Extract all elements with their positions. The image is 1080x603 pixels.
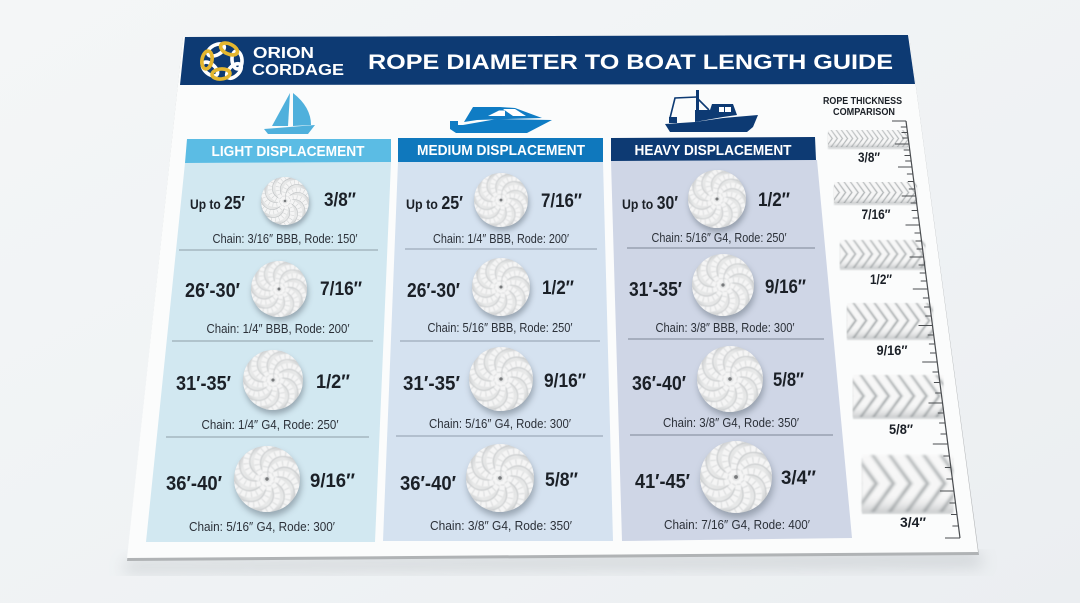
row: 41-45: 3/4″ <box>781 468 816 489</box>
row: up to 25 <box>406 168 582 246</box>
row: up to 25: Up to 25′ <box>190 193 245 213</box>
rope sample 9/16 <box>847 303 933 358</box>
icon: sailboat <box>264 93 315 134</box>
rope sample 1/2: 1/2″ <box>870 272 892 287</box>
brand name: ORION <box>253 45 314 62</box>
rope sample 1/2 <box>840 240 925 287</box>
row: 36-40: 36′-40′ <box>400 473 456 495</box>
row: 26-30: 1/2″ <box>542 278 574 299</box>
row: 31-35: 31′-35′ <box>176 373 231 395</box>
row: 31-35 <box>403 341 586 431</box>
panel header <box>185 139 391 163</box>
panel header: HEAVY DISPLACEMENT <box>634 142 792 159</box>
row: 36-40: Chain: 3/8″ G4, Rode: 350′ <box>663 416 800 430</box>
row: 36-40 <box>166 440 355 534</box>
rope sample 5/8: 5/8″ <box>889 422 914 437</box>
row: 31-35 <box>629 249 806 335</box>
title: ROPE DIAMETER TO BOAT LENGTH GUIDE <box>368 50 893 74</box>
panel header <box>611 137 816 161</box>
header banner <box>180 35 915 85</box>
row: 31-35: 31′-35′ <box>403 373 460 395</box>
row: 31-35: 9/16″ <box>544 371 586 392</box>
row: 31-35: 31′-35′ <box>629 279 682 301</box>
row: 26-30 <box>407 253 574 335</box>
row: up to 25: 3/8″ <box>324 190 356 211</box>
ruler <box>892 121 960 538</box>
row: 36-40: 36′-40′ <box>166 473 222 495</box>
row: 26-30: Chain: 5/16″ BBB, Rode: 250′ <box>428 321 573 335</box>
row: up to 25: 7/16″ <box>541 191 582 212</box>
icon: motor boat <box>450 107 552 133</box>
row: 36-40: Chain: 5/16″ G4, Rode: 300′ <box>189 520 336 534</box>
row: up to 30: Up to 30′ <box>622 193 678 213</box>
panel header <box>398 138 603 162</box>
rope sample 3/4: 3/4″ <box>900 515 927 530</box>
row: 26-30: 26′-30′ <box>407 280 460 302</box>
row: 36-40: 9/16″ <box>310 471 355 492</box>
brand name <box>252 45 344 79</box>
row: 36-40: 36′-40′ <box>632 373 686 395</box>
row: 31-35: 9/16″ <box>765 277 806 298</box>
board <box>127 35 979 561</box>
row: 31-35: 1/2″ <box>316 372 350 393</box>
row: 26-30: 7/16″ <box>320 279 362 300</box>
panel header: LIGHT DISPLACEMENT <box>212 143 364 160</box>
rope sample 3/8: 3/8″ <box>858 150 880 165</box>
row: 31-35 <box>176 345 350 432</box>
row: 36-40: 5/8″ <box>773 370 804 391</box>
comparison heading: COMPARISON <box>833 107 895 118</box>
board shadow <box>122 553 984 572</box>
comparison heading <box>823 96 902 118</box>
rope sample 9/16: 9/16″ <box>876 343 908 358</box>
panel header: MEDIUM DISPLACEMENT <box>417 142 585 159</box>
row: 26-30: 26′-30′ <box>185 280 240 302</box>
brand name: CORDAGE <box>252 62 344 79</box>
rope sample 7/16: 7/16″ <box>862 207 891 222</box>
row: up to 25: Up to 25′ <box>406 193 463 213</box>
row: up to 30: 1/2″ <box>758 190 790 211</box>
panel: heavy displacement <box>611 137 852 541</box>
row: 31-35: Chain: 5/16″ G4, Rode: 300′ <box>429 417 572 431</box>
panel: medium displacement <box>383 138 613 541</box>
rope sample 3/4 <box>862 455 953 530</box>
row: 36-40 <box>400 438 578 533</box>
logo mark <box>200 41 244 81</box>
board face <box>127 35 978 558</box>
row: 36-40: 5/8″ <box>545 470 578 491</box>
row: up to 25 <box>190 173 358 246</box>
row: 31-35: Chain: 1/4″ G4, Rode: 250′ <box>202 418 339 432</box>
row: up to 25: Chain: 3/16″ BBB, Rode: 150′ <box>212 232 358 246</box>
row: up to 25: Chain: 1/4″ BBB, Rode: 200′ <box>433 232 570 246</box>
row: up to 30: Chain: 5/16″ G4, Rode: 250′ <box>652 231 787 245</box>
panel: light displacement <box>146 139 391 542</box>
rope thickness comparison <box>823 96 960 538</box>
icon: fishing trawler <box>665 90 758 132</box>
row: 36-40 <box>632 340 804 430</box>
row: 36-40: Chain: 3/8″ G4, Rode: 350′ <box>430 519 573 533</box>
row: 41-45 <box>635 435 816 532</box>
comparison heading: ROPE THICKNESS <box>823 96 902 107</box>
rope sample 5/8 <box>853 375 943 437</box>
row: 26-30 <box>185 256 362 336</box>
row: up to 30 <box>622 165 790 245</box>
rope sample 3/8 <box>828 130 908 165</box>
row: 41-45: 41′-45′ <box>635 471 690 493</box>
row: 26-30: Chain: 1/4″ BBB, Rode: 200′ <box>206 322 350 336</box>
row: 31-35: Chain: 3/8″ BBB, Rode: 300′ <box>656 321 795 335</box>
logo <box>200 41 344 81</box>
rope sample 7/16 <box>834 182 917 222</box>
row: 41-45: Chain: 7/16″ G4, Rode: 400′ <box>664 518 811 532</box>
